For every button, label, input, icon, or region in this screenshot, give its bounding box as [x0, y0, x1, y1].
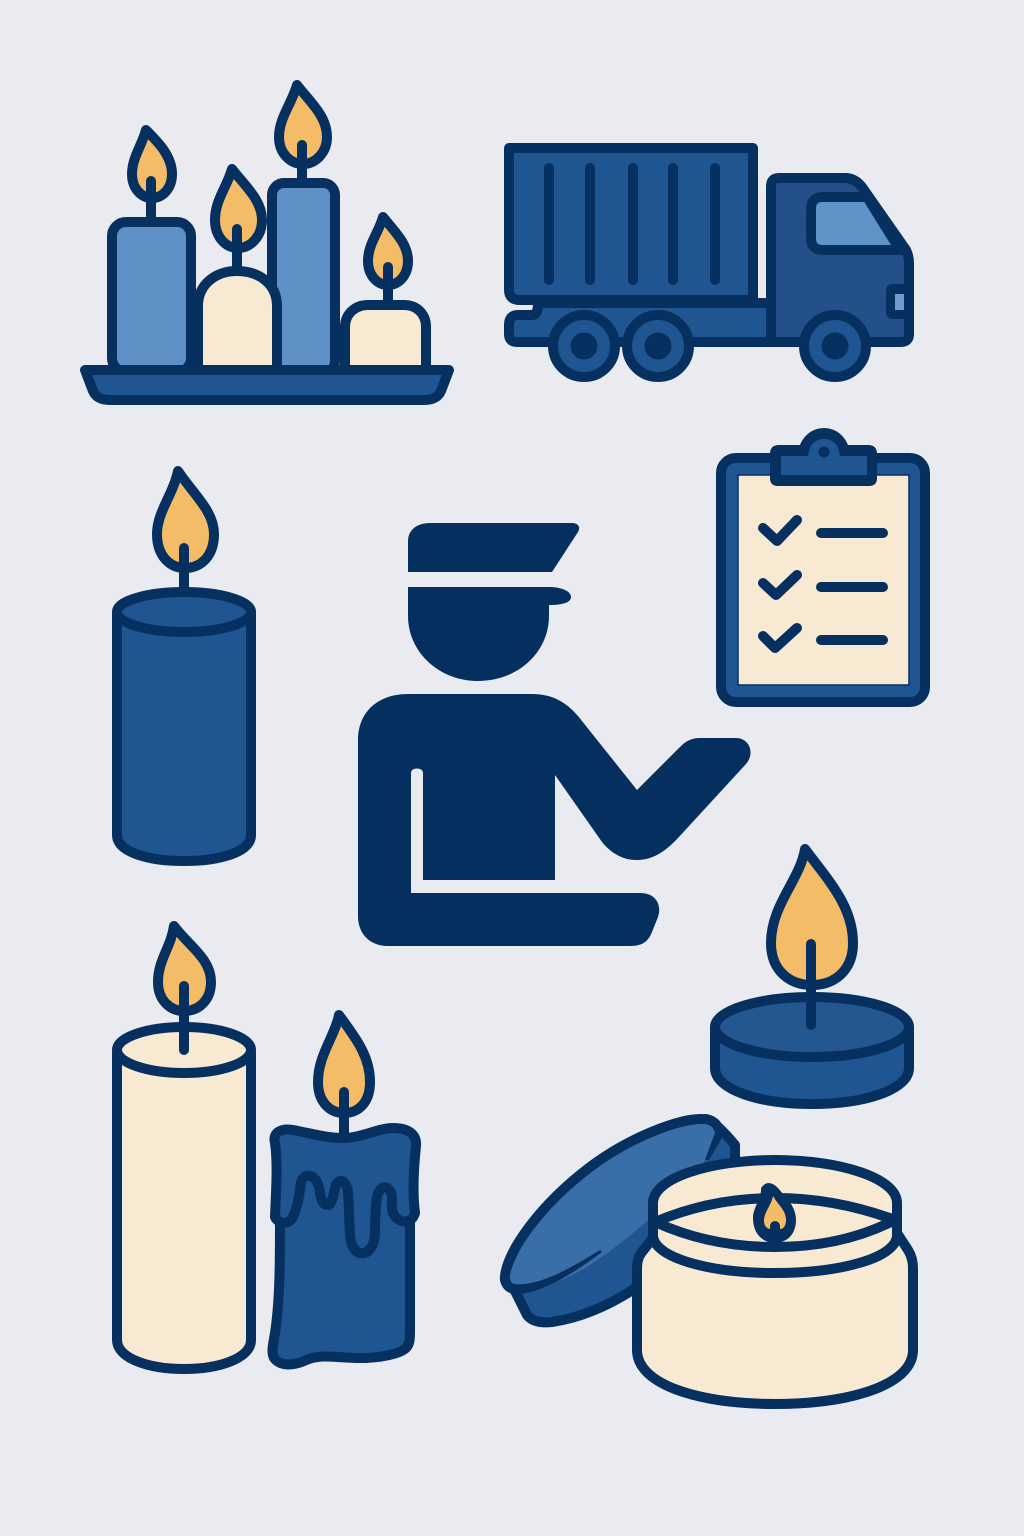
candle: small right cream — [345, 217, 426, 372]
cab window — [811, 197, 900, 250]
jar wick — [770, 1226, 780, 1243]
wheel — [804, 315, 866, 377]
cap visor and head — [408, 587, 571, 681]
clipboard board — [721, 458, 925, 702]
wheel — [627, 315, 689, 377]
jar body — [637, 1233, 913, 1404]
candle flame — [318, 1015, 370, 1113]
icon: candle jar with lid — [505, 1119, 913, 1404]
body — [358, 694, 751, 946]
icon: candle group on tray — [85, 85, 449, 400]
paper — [738, 475, 909, 685]
cab — [771, 178, 909, 342]
candle: middle cream — [198, 169, 277, 372]
icon: tall dark blue candle — [117, 471, 251, 861]
candle body — [272, 1170, 410, 1364]
wheel — [553, 315, 615, 377]
jar rim — [653, 1160, 897, 1273]
candle: tallest blue — [272, 85, 335, 373]
melted wax top — [274, 1128, 416, 1253]
jar lid — [505, 1119, 736, 1322]
checklist rows — [763, 520, 883, 648]
icon: dripping blue candle — [272, 1015, 416, 1364]
truck chassis — [509, 303, 772, 342]
icon: delivery truck — [509, 148, 909, 377]
icon: clipboard checklist — [721, 428, 925, 702]
tray — [85, 370, 449, 400]
candle wick — [339, 1092, 349, 1136]
jar wax surface — [655, 1198, 895, 1247]
clip — [770, 428, 877, 486]
icon: inspector person — [358, 523, 751, 946]
cab light — [886, 284, 904, 319]
cargo container — [509, 148, 753, 300]
cap top — [408, 523, 579, 572]
icon: tea light candle — [715, 849, 909, 1104]
jar flame — [753, 1183, 796, 1243]
icon: tall cream candle — [117, 926, 251, 1369]
candle: tall left blue — [112, 130, 191, 372]
